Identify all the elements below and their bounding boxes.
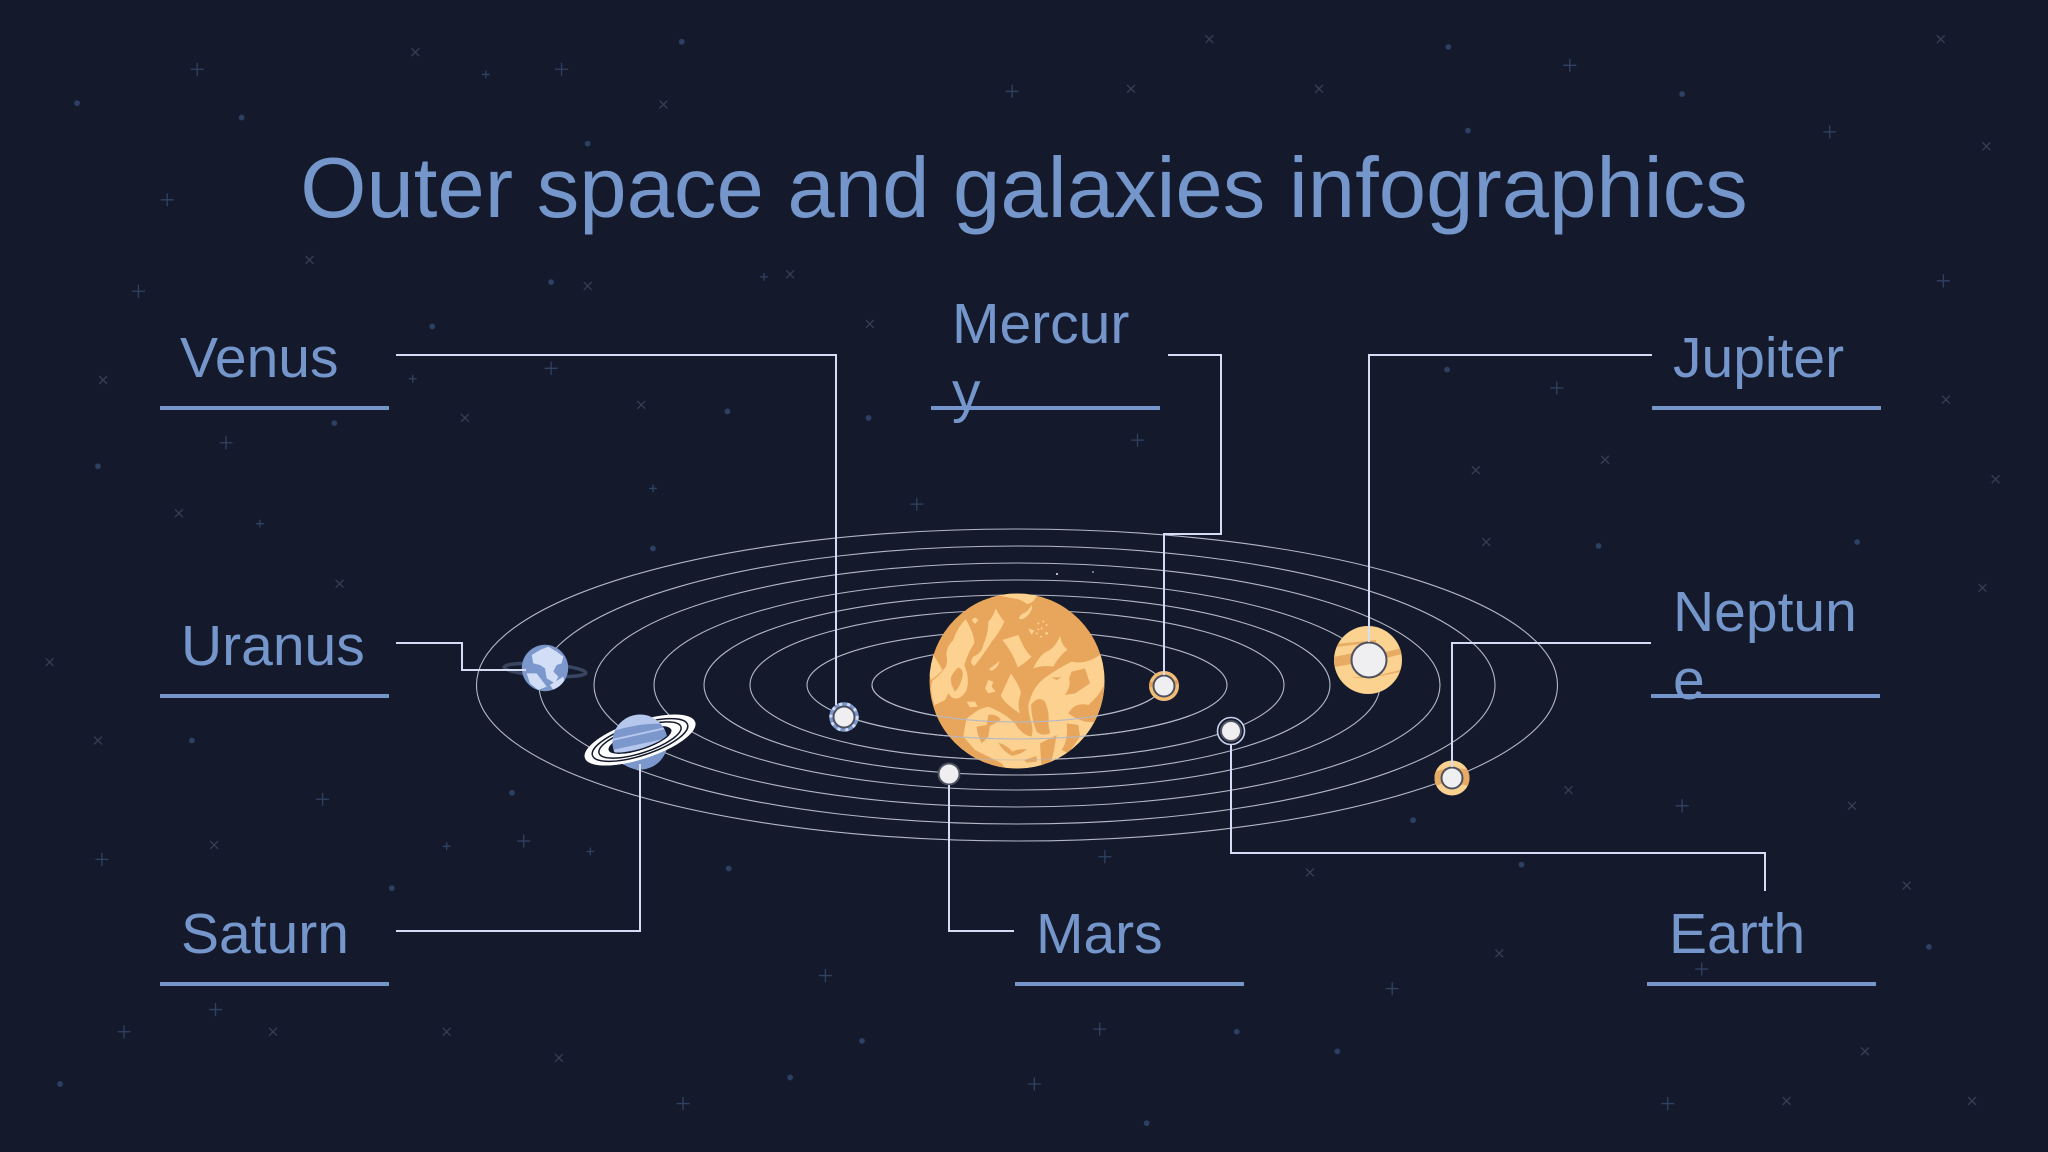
label: Jupiter: Jupiter [1673, 326, 1844, 390]
planet: Mars [938, 764, 960, 784]
label: Uranus: Uranus [181, 614, 365, 678]
label: Mercury: y [952, 360, 981, 424]
orbits [476, 529, 1558, 841]
label: Mars: Mars [1036, 902, 1163, 966]
label: Mercury: Mercur [952, 292, 1129, 356]
planet: Saturn [584, 714, 696, 770]
orbit lines over sun [850, 685, 1190, 760]
planet: Earth [1218, 718, 1244, 744]
label: Neptune [1651, 580, 1880, 712]
label: Mercury [931, 292, 1160, 424]
label: Earth: Earth [1669, 902, 1805, 966]
connector lines [396, 355, 1765, 931]
planet: Uranus [504, 645, 586, 691]
label: Neptune: e [1673, 648, 1705, 712]
planet: Mercury [1149, 671, 1179, 701]
title: Outer space and galaxies infographics [300, 141, 1748, 236]
label: Saturn: Saturn [181, 902, 349, 966]
label: Neptune: Neptun [1673, 580, 1857, 644]
planet: Neptune [1434, 760, 1470, 796]
tiny stars near sun [1056, 571, 1094, 575]
planet: Jupiter [1334, 626, 1402, 694]
planet: Venus [831, 704, 857, 730]
label: Venus: Venus [180, 326, 338, 390]
sun [930, 594, 1104, 768]
